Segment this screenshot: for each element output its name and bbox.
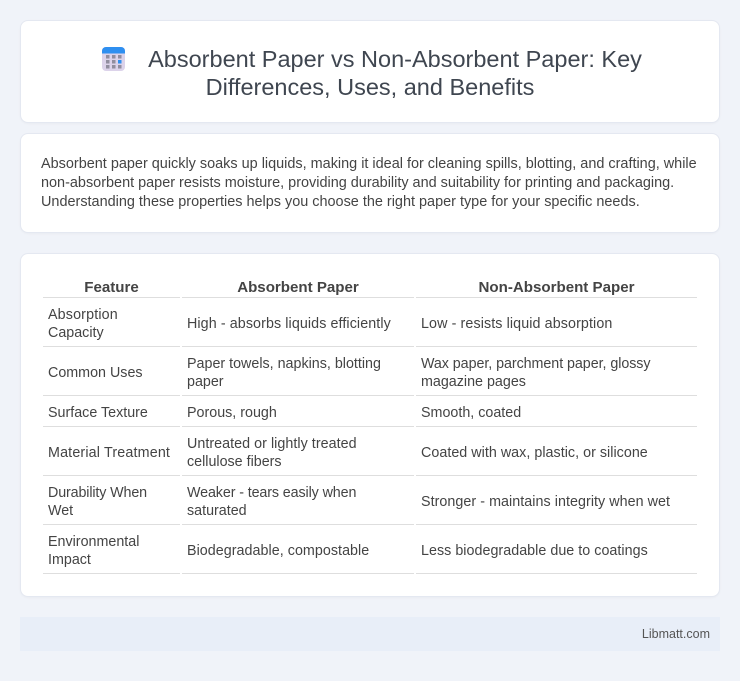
row: durability when wet: Durability When: [48, 485, 147, 501]
panel: comparison table: [20, 253, 720, 597]
row: absorption capacity: Capacity: [48, 325, 104, 341]
panel: introduction: [20, 133, 720, 233]
row: surface texture: Porous, rough: [187, 405, 277, 421]
intro text: [41, 156, 697, 210]
table header: Feature: [84, 279, 139, 296]
table header: Non-Absorbent Paper: [478, 279, 634, 296]
row: absorption capacity: [43, 307, 697, 347]
footer text: Libmatt.com: [642, 627, 710, 641]
title: Differences, Uses, and Benefits: [206, 74, 534, 100]
table header: Absorbent Paper: [237, 279, 359, 296]
row: absorption capacity: High - absorbs liquids efficiently: [187, 316, 391, 332]
row: durability when wet: Wet: [48, 503, 73, 519]
row: absorption capacity: Low - resists liquid absorption: [421, 316, 612, 332]
row: environmental impact: Less biodegradable due to coatings: [421, 543, 648, 559]
row: common uses: Paper towels, napkins, blotting: [187, 356, 381, 372]
row: common uses: Wax paper, parchment paper, glossy: [421, 356, 650, 372]
row: environmental impact: Biodegradable, compostable: [187, 543, 369, 559]
row: material treatment: Coated with wax, plastic, or silicone: [421, 445, 648, 461]
footer bar: [20, 617, 720, 651]
intro text: Understanding these properties helps you choose the right paper type for your specific needs.: [41, 194, 640, 210]
row: durability when wet: Weaker - tears easily when: [187, 485, 356, 501]
title: [148, 46, 642, 100]
row: environmental impact: [43, 534, 697, 574]
title: Absorbent Paper vs Non-Absorbent Paper: Key: [148, 46, 642, 72]
row: common uses: paper: [187, 374, 224, 390]
row: surface texture: [43, 405, 697, 427]
row: common uses: magazine pages: [421, 374, 526, 390]
row: durability when wet: saturated: [187, 503, 247, 519]
row: common uses: Common Uses: [48, 365, 143, 381]
row: material treatment: Material Treatment: [48, 445, 170, 461]
row: durability when wet: Stronger - maintains integrity when wet: [421, 494, 670, 510]
row: durability when wet: [43, 485, 697, 525]
table header: [43, 279, 697, 298]
row: environmental impact: Impact: [48, 552, 91, 568]
row: absorption capacity: Absorption: [48, 307, 118, 323]
row: material treatment: [43, 436, 697, 476]
row: material treatment: Untreated or lightly treated: [187, 436, 357, 452]
row: material treatment: cellulose fibers: [187, 454, 282, 470]
row: common uses: [43, 356, 697, 396]
row: surface texture: Smooth, coated: [421, 405, 521, 421]
row: surface texture: Surface Texture: [48, 405, 148, 421]
intro text: non-absorbent paper resists moisture, providing durability and suitability for printing and packaging.: [41, 175, 674, 191]
intro text: Absorbent paper quickly soaks up liquids, making it ideal for cleaning spills, blotting, and crafting, while: [41, 156, 697, 172]
icon: calendar: [102, 47, 125, 71]
row: environmental impact: Environmental: [48, 534, 139, 550]
panel: title card: [20, 20, 720, 123]
